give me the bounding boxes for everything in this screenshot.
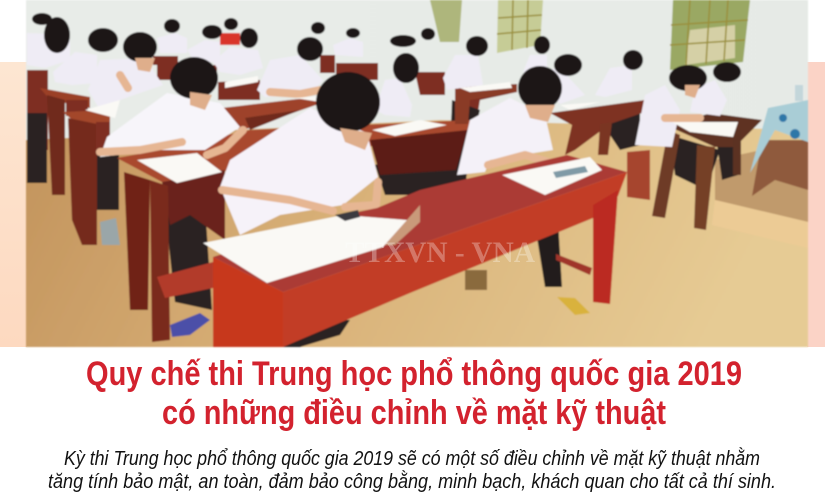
white shirts [27,33,727,235]
blue slipper [170,313,210,337]
right middle desks [455,85,645,155]
left desk 3 [63,110,110,245]
hair [32,13,741,132]
floor [26,120,808,347]
windows [430,0,750,70]
front papers [203,157,602,283]
front red desk [213,155,627,347]
raised platform [712,140,808,248]
title [86,355,742,432]
left peach strip [0,62,27,347]
sneaker [100,218,120,245]
small papers [85,76,738,183]
intro paragraph [48,447,776,493]
title line 2: có những điều chỉnh về mặt kỹ thuật [162,394,666,432]
faces [135,58,700,150]
stool [157,262,213,298]
watermark: TTXVN - VNA [345,236,535,269]
middle desk [117,97,470,342]
left back desk 4 [40,88,90,195]
photo: students taking exam [26,0,808,347]
back row desks [27,55,517,150]
wall [26,0,808,160]
skin arms [100,75,700,211]
feet under front desk [240,220,590,347]
right pink strip [807,62,825,347]
red shirt [220,33,240,45]
dark clothes under left desks [27,100,740,310]
side table with blue cloth [750,85,808,196]
stool right [627,150,650,200]
far right desk [652,113,762,230]
